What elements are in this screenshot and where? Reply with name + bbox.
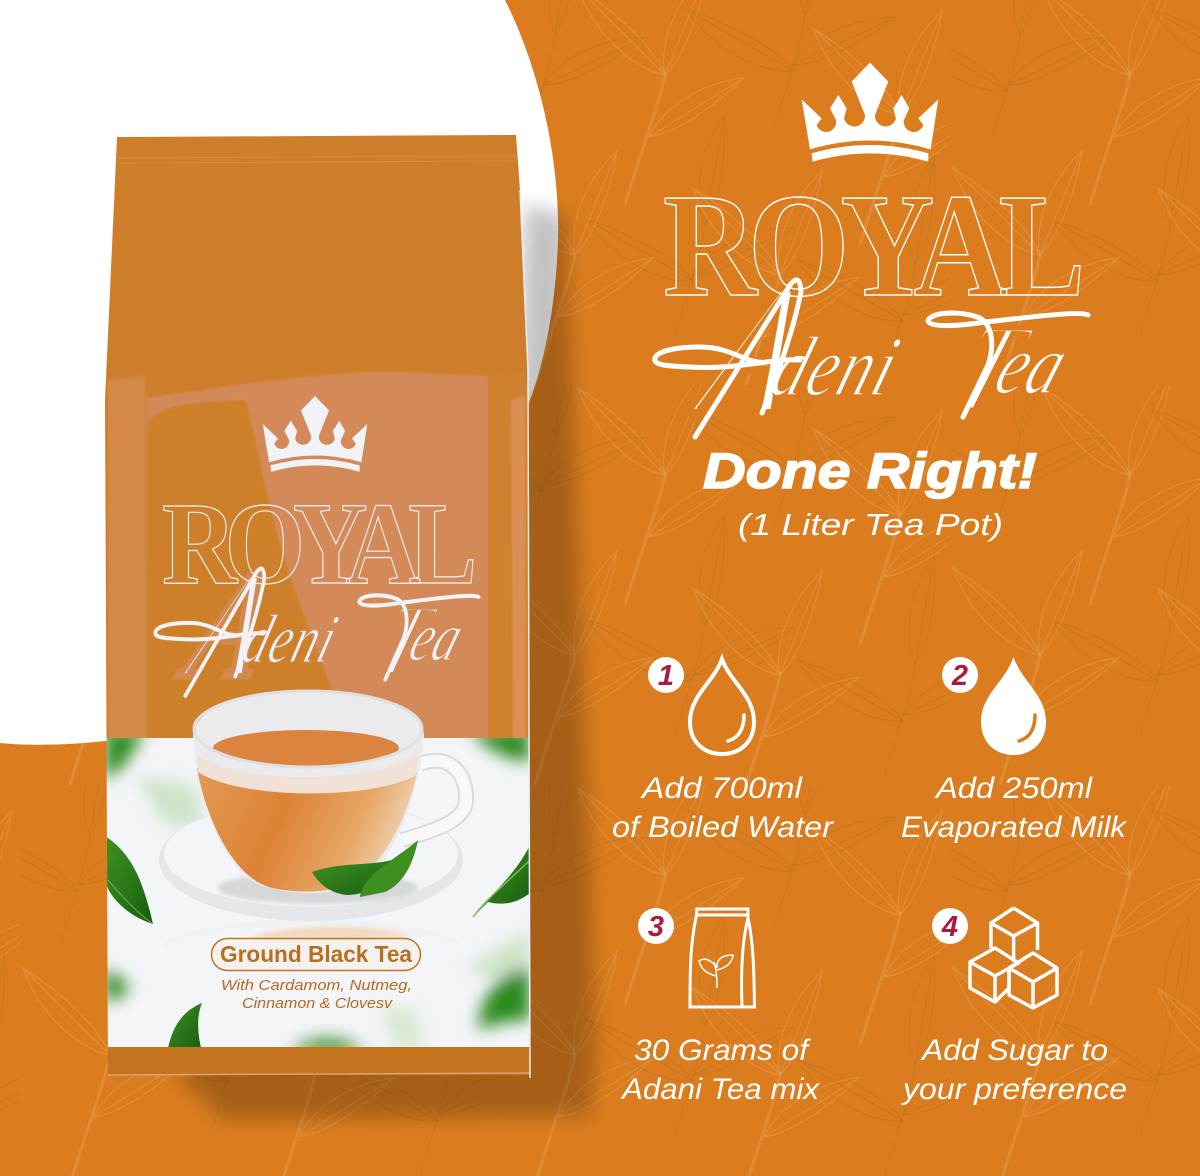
bag: ROYAL outlined wordmark: ROYAL	[162, 479, 474, 610]
icon: tea bag	[690, 909, 754, 1007]
tea bag package	[100, 130, 535, 1077]
step 2 text: Add 250ml	[934, 772, 1093, 805]
number badge 3	[638, 908, 674, 944]
step 3 text	[620, 1034, 820, 1106]
bag: script name Adeni Tea: ea	[401, 600, 473, 676]
step 1 text: of Boiled Water	[612, 811, 834, 844]
heading: Done Right!: Done Right!	[703, 443, 1037, 499]
number badge 4: 4	[941, 911, 958, 943]
white curved panel behind bag	[0, 0, 558, 745]
ROYAL outlined wordmark: ROYAL	[663, 164, 1081, 328]
step 4 text: your preference	[901, 1073, 1127, 1106]
bag: flavour description: With Cardamom, Nutmeg,	[221, 978, 412, 994]
step 3: tea mix	[620, 908, 820, 1106]
bag: script name Adeni Tea: A	[165, 539, 291, 710]
script name Adeni Tea: A	[668, 244, 837, 455]
second leaf on cup	[360, 840, 418, 897]
step 4 text	[901, 1034, 1127, 1106]
bag right highlight	[511, 395, 526, 740]
number badge 1: 1	[658, 660, 674, 692]
tea body	[197, 768, 417, 892]
script name Adeni Tea: deni	[761, 320, 911, 414]
number badge 3: 3	[648, 911, 664, 943]
step 1 text: Add 700ml	[640, 772, 803, 805]
bag dark reflection	[147, 400, 348, 740]
step 3 text: Adani Tea mix	[620, 1073, 820, 1106]
leaf: bottom	[168, 1003, 202, 1048]
bag left gloss strip	[108, 376, 148, 740]
teacup on saucer	[159, 691, 466, 945]
icon: sugar cubes	[970, 908, 1057, 1008]
bag right white edge	[520, 190, 530, 1078]
leaf on cup	[312, 860, 392, 895]
cup rim	[194, 691, 422, 767]
step 2 text	[901, 772, 1128, 844]
tea surface	[213, 730, 399, 766]
blurred leaves on label	[105, 730, 530, 1052]
step 1: boiled water	[612, 657, 834, 844]
bag: script name Adeni Tea: T	[365, 584, 448, 696]
cup handle	[402, 761, 466, 840]
cup handle edge	[402, 761, 466, 840]
bag bottom strip	[100, 1047, 535, 1077]
bag: script name Adeni Tea: deni	[234, 602, 347, 677]
script flourishes	[655, 280, 1088, 437]
number badge 1	[648, 657, 684, 693]
subheading: 1 Liter Tea Pot: (1 Liter Tea Pot)	[738, 507, 1003, 542]
step 4: sugar	[901, 908, 1127, 1106]
step 4 text: Add Sugar to	[920, 1034, 1108, 1067]
script name Adeni Tea: ea	[984, 318, 1081, 412]
number badge 4	[932, 908, 968, 944]
number badge 2	[942, 657, 978, 693]
step 1 text	[612, 772, 834, 844]
crown logo	[802, 63, 938, 162]
bag top seal lines	[117, 156, 518, 163]
label: white photo area	[100, 738, 535, 1048]
cup shadow	[218, 872, 418, 904]
script name Adeni Tea: T	[936, 300, 1046, 438]
icon: water drop outline	[690, 659, 754, 754]
icon: milk drop filled	[981, 657, 1046, 755]
bag upper panel	[100, 130, 535, 740]
cup glass	[193, 691, 424, 893]
bag: script name Adeni Tea	[165, 539, 478, 710]
saucer inner	[164, 814, 458, 907]
leaf: right edge	[473, 845, 530, 917]
bag: script flourishes	[155, 569, 479, 696]
bag right gloss	[488, 376, 489, 738]
bag shadow	[175, 205, 596, 1120]
bag bottom edge	[108, 1073, 530, 1075]
bag: flavour description: Cinnamon & Clovesv	[242, 996, 393, 1012]
tea reflection	[248, 927, 415, 940]
cup reflection	[165, 922, 460, 945]
bag: crown logo	[263, 396, 367, 472]
bag glossy light panel	[146, 372, 488, 740]
bag: flavour description	[221, 978, 412, 1012]
saucer	[159, 813, 463, 921]
step 3 text: 30 Grams of	[634, 1034, 811, 1067]
glass band	[197, 752, 418, 793]
bag: Ground Black Tea pill: Ground Black Tea	[220, 941, 412, 967]
leaf: left edge	[105, 836, 153, 924]
script name Adeni Tea	[668, 244, 1087, 455]
step 2 text: Evaporated Milk	[901, 811, 1128, 844]
number badge 2: 2	[951, 660, 968, 692]
step 2: evaporated milk	[901, 657, 1128, 844]
